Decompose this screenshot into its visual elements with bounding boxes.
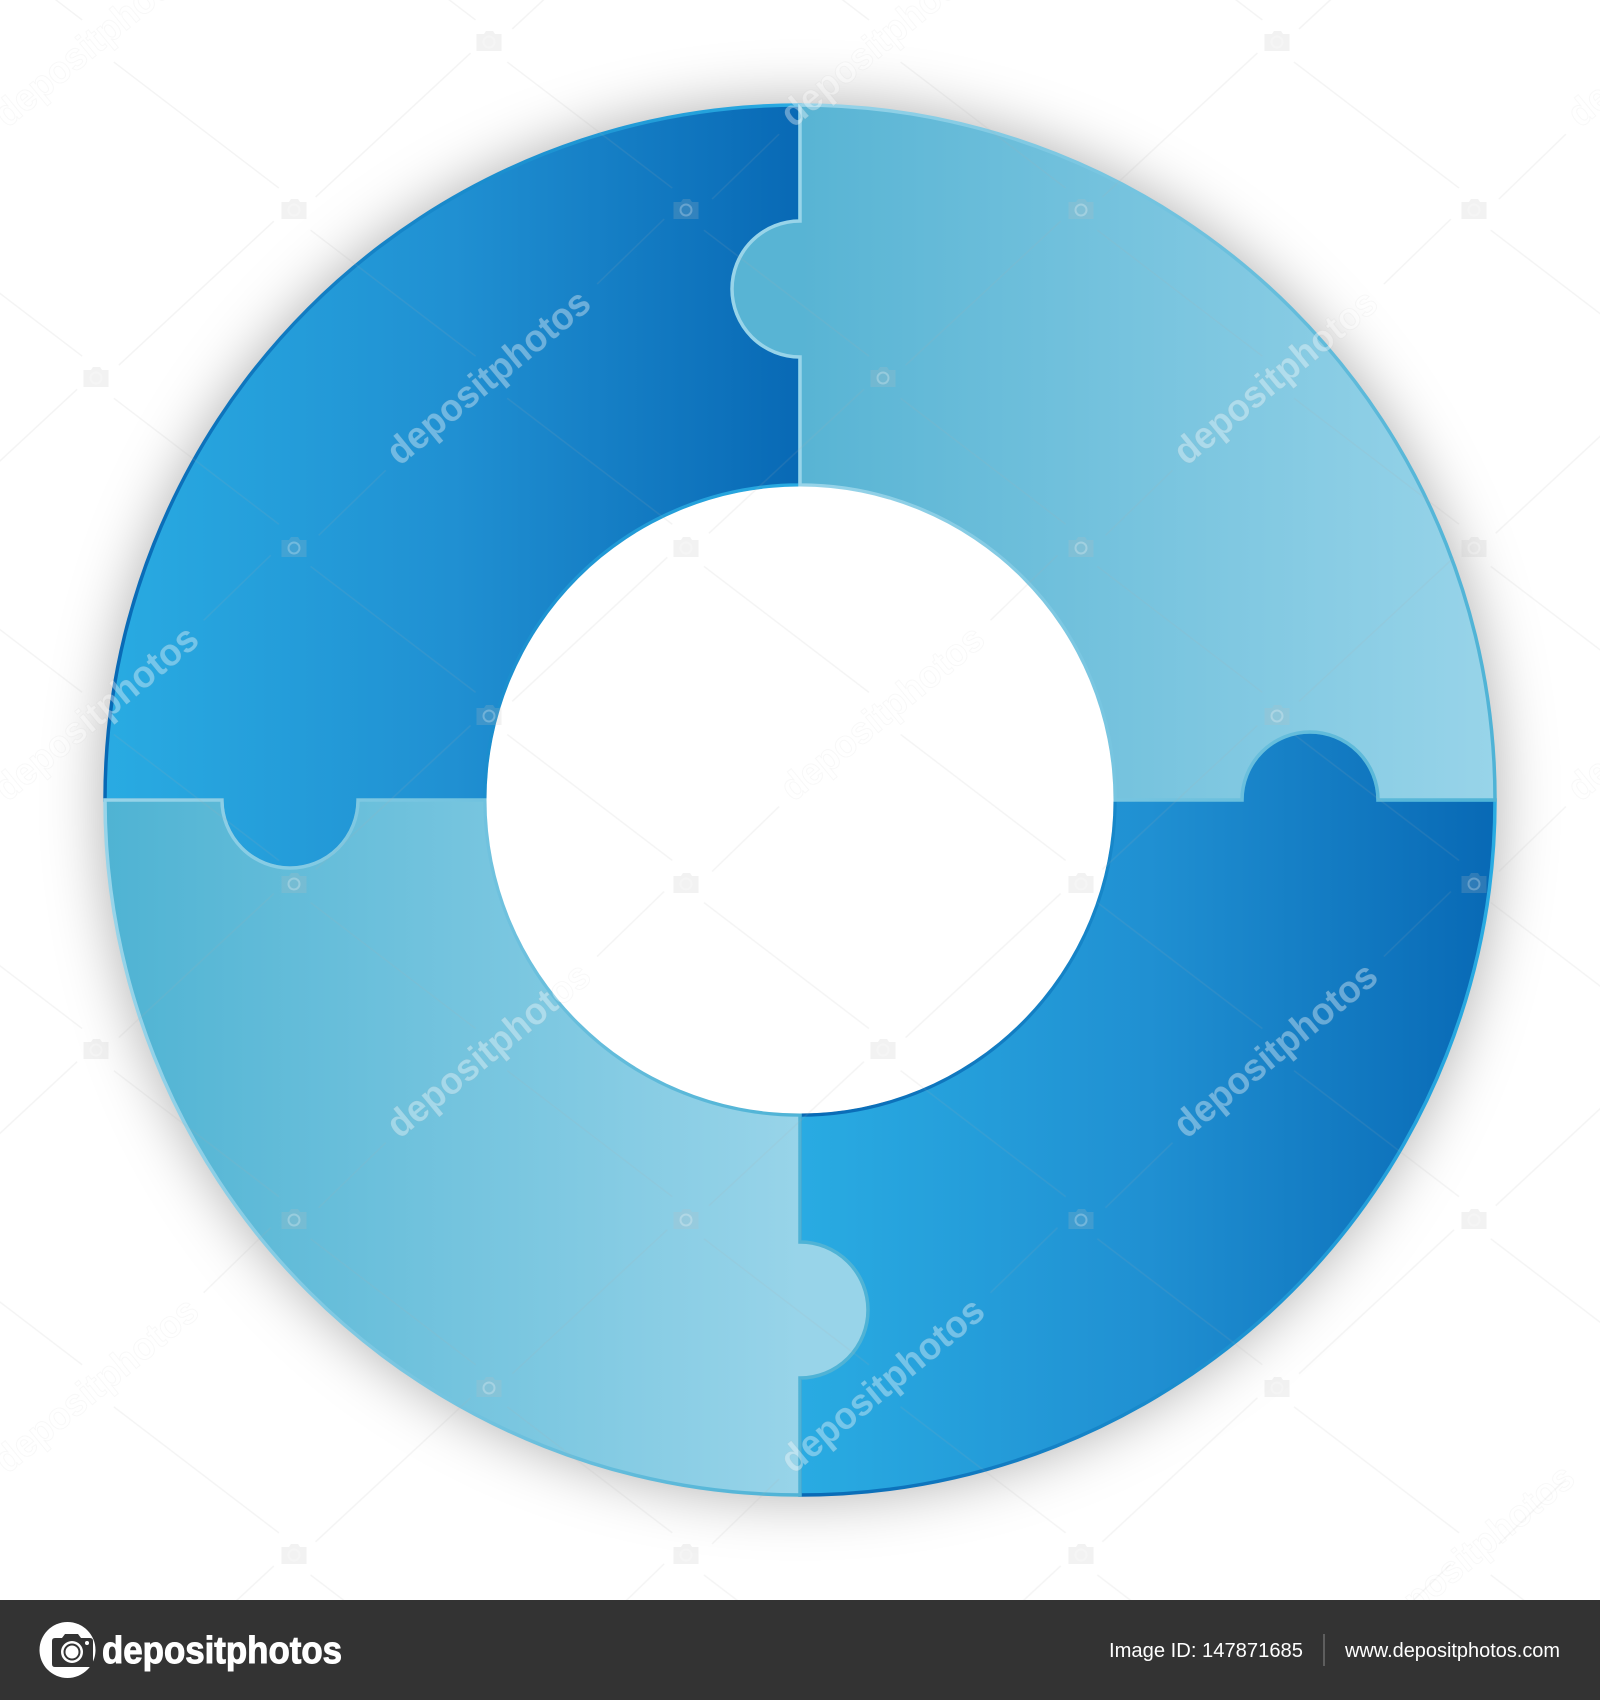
icon: depositphotos camera logo [40, 1622, 96, 1678]
camera watermark icons [84, 31, 1486, 1564]
image id: Image ID: 147871685 [1109, 1640, 1303, 1662]
puzzle ring chart [105, 105, 1495, 1495]
depositphotos text watermarks: depositphotos [379, 281, 599, 473]
puzzle piece: top left, dark blue [105, 105, 800, 868]
puzzle piece: bottom left, light blue [105, 800, 868, 1495]
puzzle piece: bottom right, dark blue [800, 732, 1495, 1495]
puzzle piece: top right, light blue [732, 105, 1495, 800]
depositphotos text watermarks: depositphotos [773, 617, 993, 809]
depositphotos text watermarks: depositphotos [1166, 281, 1386, 473]
centre white circle [486, 486, 1114, 1114]
depositphotos text watermarks: depositphotos [773, 1289, 993, 1481]
depositphotos text watermarks: depositphotos [1166, 954, 1386, 1146]
footer divider [1324, 1634, 1325, 1666]
logo wordmark: depositphotos [102, 1630, 342, 1672]
depositphotos text watermarks: depositphotos [1363, 1456, 1583, 1648]
website url: www.depositphotos.com [1344, 1640, 1560, 1662]
footer bar [0, 1600, 1600, 1700]
drop shadow of the ring [105, 105, 1495, 1495]
depositphotos text watermarks: depositphotos [379, 954, 599, 1146]
